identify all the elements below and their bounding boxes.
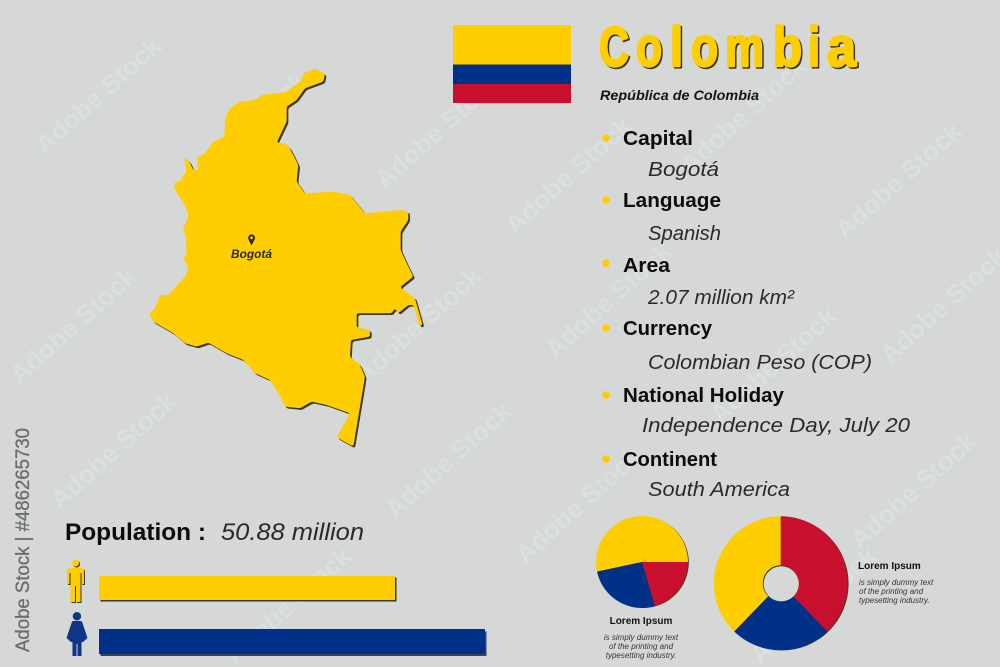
text: Adobe Stock [829, 115, 968, 244]
text: Adobe Stock [704, 300, 843, 429]
capital label: Bogotá [231, 247, 272, 261]
text: Adobe Stock [4, 260, 143, 389]
fact: national holiday: National Holiday [623, 385, 785, 407]
title: o [638, 16, 664, 80]
flag of Colombia [453, 25, 571, 103]
map shape [149, 68, 423, 447]
donut caption: typesetting industry. [859, 596, 930, 605]
text: Adobe Stock [174, 65, 313, 194]
text: Adobe Stock [509, 440, 648, 569]
title: a [827, 15, 857, 78]
text: Adobe Stock [379, 395, 518, 524]
text: Adobe Stock [744, 540, 883, 667]
text: Adobe Stock [349, 260, 488, 389]
fact: language: Spanish [648, 223, 721, 245]
title: i [808, 15, 820, 78]
text: Adobe Stock [29, 30, 168, 159]
map shadow [151, 70, 424, 448]
icon: man [67, 559, 85, 603]
fact: capital: Bogotá [648, 159, 719, 181]
title: l [670, 15, 683, 78]
title [599, 15, 858, 80]
fact: national holiday: Independence Day, July 20 [642, 415, 910, 437]
pie caption: Lorem Ipsum [610, 616, 672, 627]
subtitle: República de Colombia [600, 87, 759, 103]
pie caption: typesetting industry. [606, 651, 676, 660]
stock id text: Adobe Stock | #486265730 [13, 428, 34, 652]
title: i [810, 16, 822, 80]
text: Adobe Stock [499, 110, 638, 239]
text: Adobe Stock [844, 425, 983, 554]
title: l [672, 16, 684, 80]
bar: female population [99, 629, 486, 656]
title: b [773, 15, 802, 78]
bar: male population [99, 576, 396, 602]
fact: area: Area [623, 255, 671, 277]
donut caption: Lorem Ipsum [858, 561, 921, 572]
text: Adobe Stock [44, 385, 183, 514]
population heading: 50.88 million [221, 519, 364, 546]
title: C [600, 16, 630, 80]
icon: woman [66, 612, 88, 656]
text: Adobe Stock [369, 65, 508, 194]
fact: currency [602, 318, 872, 374]
text: Adobe Stock [219, 540, 358, 667]
pie caption: is simply dummy text [604, 633, 679, 642]
fact: area: 2.07 million km² [647, 287, 795, 309]
pie chart [596, 516, 689, 608]
fact: national holiday [602, 385, 910, 437]
title: b [774, 16, 804, 80]
population heading: Population : [65, 519, 206, 546]
pie caption: of the printing and [609, 642, 674, 651]
title: C [599, 15, 629, 78]
population heading [65, 519, 364, 546]
icon: map pin [248, 234, 255, 246]
fact: language: Language [623, 190, 721, 212]
facts list [602, 128, 910, 501]
title: o [691, 15, 718, 78]
text: Adobe Stock [539, 235, 678, 364]
donut chart [714, 516, 849, 650]
fact: continent: South America [648, 479, 790, 501]
text: Adobe Stock [209, 210, 348, 339]
fact: continent [602, 449, 790, 501]
donut caption: is simply dummy text [859, 578, 934, 587]
map of Colombia [149, 68, 424, 448]
fact: capital [602, 128, 719, 181]
title: a [828, 16, 858, 80]
fact: continent: Continent [623, 449, 717, 471]
fact: language [602, 190, 721, 245]
title: m [725, 15, 764, 78]
title: o [692, 16, 720, 80]
text: Adobe Stock [674, 50, 813, 179]
donut caption [858, 561, 934, 605]
fact: currency: Colombian Peso (COP) [648, 352, 872, 374]
fact: capital: Capital [623, 128, 693, 150]
fact: currency: Currency [623, 318, 713, 340]
title: m [726, 16, 766, 80]
pie caption [604, 616, 679, 660]
title: o [636, 15, 662, 78]
donut caption: of the printing and [859, 587, 924, 596]
fact: area [602, 255, 795, 309]
